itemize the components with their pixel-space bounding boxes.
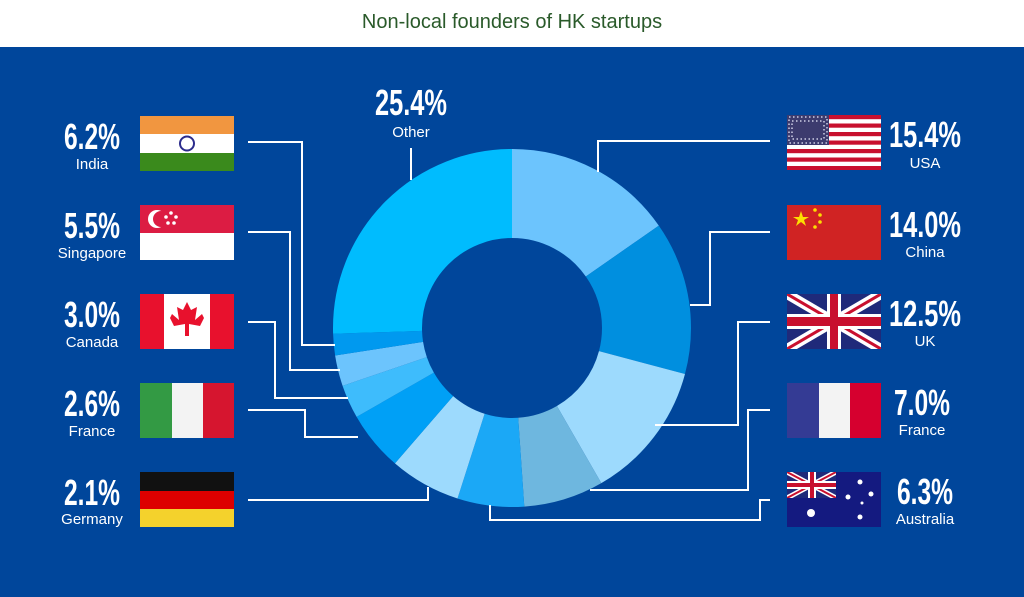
flag: China [787,205,881,260]
label: France (left) [64,383,120,440]
flag: Australia [787,472,881,527]
label: Canada: 3.0% [64,294,120,335]
label: Germany: Germany [61,511,123,528]
leader lines [248,141,770,520]
label: UK: UK [915,333,935,350]
label: Canada: Canada [66,334,119,351]
label: China: 14.0% [889,204,961,245]
label: Australia: 6.3% [897,471,953,512]
label: other: Other [392,124,430,141]
label: USA [889,114,961,172]
label: France (left): France [69,423,115,440]
label: UK [889,293,961,350]
label: China [889,204,961,261]
label: Australia [896,471,955,528]
flag: USA [787,115,881,170]
label: China: China [905,244,945,261]
label: India: 6.2% [64,116,120,157]
flag: France [787,383,881,438]
label: Australia: Australia [896,511,955,528]
label: India [64,116,120,173]
label: other: 25.4% [375,82,447,123]
flag: India [140,116,234,171]
flag: UK [787,294,881,349]
flag: Canada [140,294,234,349]
label: France (left): 2.6% [64,383,120,424]
title: Non-local founders of HK startups [362,11,662,33]
label: France (right) [894,382,950,439]
label: Germany [61,472,123,528]
label: Singapore: 5.5% [64,205,120,246]
flag: Italy [140,383,234,438]
label: USA: 15.4% [889,114,961,155]
label: other [375,82,447,141]
label: India: India [76,156,109,173]
flag: Germany [140,472,234,527]
header bar [0,0,1024,47]
label: France (right): France [899,422,945,439]
label: Singapore [58,205,126,262]
flag: Singapore [140,205,234,260]
label: USA: USA [910,155,940,172]
label: Singapore: Singapore [58,245,126,262]
label: Canada [64,294,120,351]
label: Germany: 2.1% [64,472,120,513]
label: UK: 12.5% [889,293,961,334]
donut chart [378,194,646,462]
label: France (right): 7.0% [894,382,950,423]
